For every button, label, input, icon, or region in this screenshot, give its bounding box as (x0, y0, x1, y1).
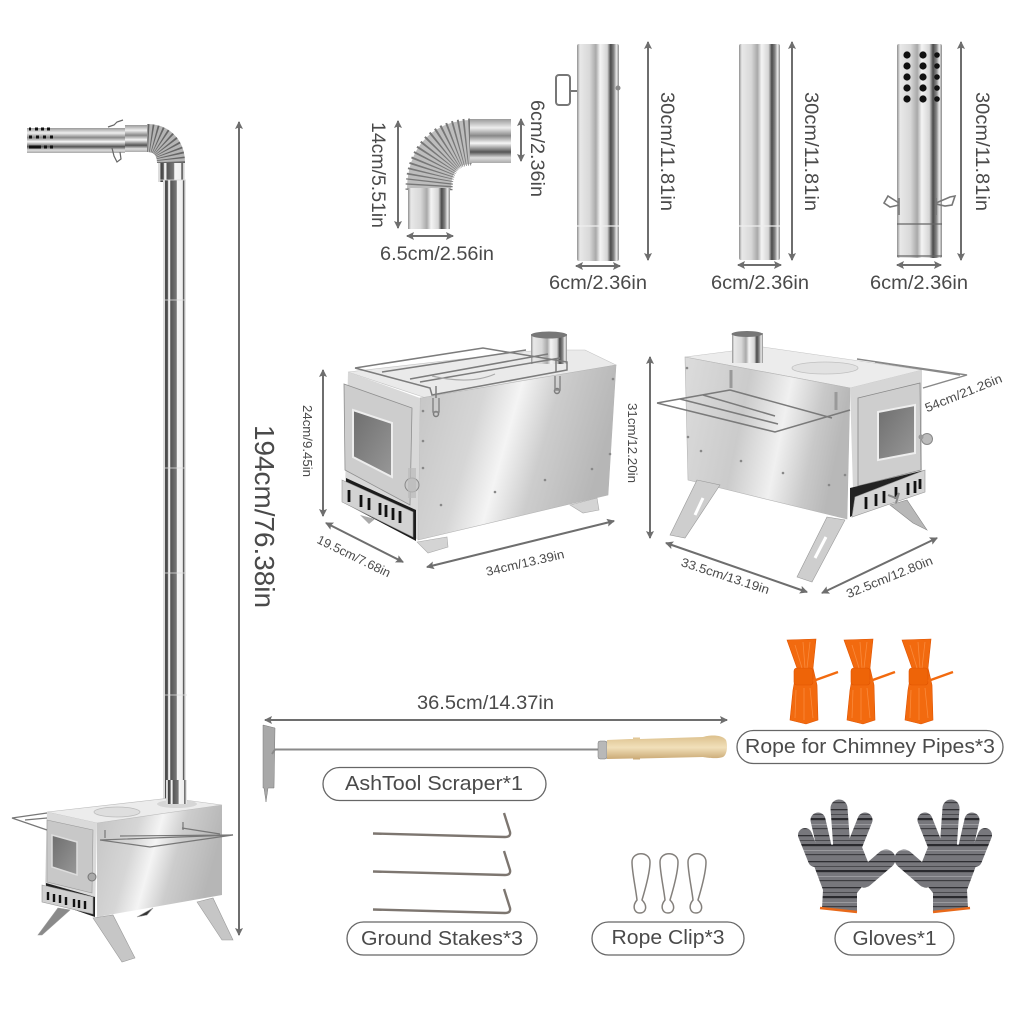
cap pipe body (897, 44, 942, 258)
cap pipe with vent holes (884, 44, 955, 258)
chimney elbow (147, 138, 171, 163)
screws (686, 367, 846, 486)
stove body side (97, 805, 222, 917)
ash drawer (850, 470, 925, 517)
damper pipe width arrow (576, 265, 620, 267)
height label: 194cm/76.38in (249, 425, 280, 608)
packed stove depth arrow (326, 523, 403, 562)
left glove (805, 808, 886, 912)
cap pipe width arrow (897, 264, 941, 266)
wooden handle (607, 735, 727, 760)
stove top plate (94, 807, 140, 817)
gloves label pill (835, 922, 954, 955)
top plate (432, 374, 495, 380)
damper knob (616, 86, 620, 90)
door (858, 383, 921, 486)
stove open view (657, 331, 967, 582)
stakes label pill (347, 922, 537, 955)
scraper label pill: AshTool Scraper*1 (345, 773, 523, 795)
chimney cap horizontal pipe (27, 120, 147, 162)
door knob (918, 434, 932, 444)
clip 1 (632, 854, 650, 913)
rope bundle 3 (902, 639, 953, 724)
packed stove length label: 34cm/13.39in (485, 547, 566, 579)
cap pipe width label: 6cm/2.36in (870, 272, 968, 294)
open stove height label: 31cm/12.20in (625, 403, 639, 483)
clip 3 (688, 854, 706, 913)
packed stove height label: 24cm/9.45in (300, 405, 314, 477)
damper pipe (556, 44, 620, 261)
ash drawer (342, 478, 416, 541)
ash scraper tool (263, 725, 727, 802)
packed stove depth label: 19.5cm/7.68in (315, 533, 393, 580)
open stove depth label: 32.5cm/12.80in (844, 554, 935, 601)
pipe body (577, 44, 619, 261)
rope bundle 2 (844, 639, 895, 724)
pipe collar line (577, 225, 619, 227)
elbow width label: 6.5cm/2.56in (380, 243, 494, 265)
cap pipe collar (897, 224, 942, 256)
elbow height arrow (397, 121, 399, 228)
chimney vertical pipe (158, 162, 187, 806)
blade (263, 725, 275, 802)
straight pipe width arrow (738, 264, 781, 266)
damper pipe height label: 30cm/11.81in (656, 92, 678, 211)
straight pipe width label: 6cm/2.36in (711, 272, 809, 294)
ground stakes (373, 813, 510, 913)
door latch (405, 468, 419, 498)
ash drawer (42, 883, 95, 917)
gloves (805, 808, 985, 912)
gloves label pill: Gloves*1 (852, 928, 936, 950)
elbow height label: 14cm/5.51in (367, 122, 389, 228)
door (344, 384, 412, 505)
scraper width label: 36.5cm/14.37in (417, 692, 554, 714)
clips label pill: Rope Clip*3 (612, 927, 724, 949)
wing clips (884, 196, 955, 215)
elbow outlet arrow (520, 119, 522, 161)
side panel (418, 365, 616, 540)
cap pipe height label: 30cm/11.81in (971, 92, 993, 211)
stove packed view (342, 332, 616, 553)
front panel (850, 370, 922, 490)
cap pipe height arrow (960, 42, 962, 260)
open stove length label: 33.5cm/13.19in (679, 555, 771, 597)
back leg (890, 500, 927, 530)
outlet pipe (732, 331, 763, 363)
straight pipe height arrow (791, 42, 793, 260)
clip 2 (660, 854, 678, 913)
stove top (47, 798, 222, 823)
side rack (657, 370, 850, 432)
stove legs (38, 898, 233, 962)
front panel (345, 372, 420, 540)
elbow outlet (470, 119, 511, 163)
stake 1 (373, 813, 510, 837)
elbow width arrow (407, 235, 453, 237)
ropes (787, 639, 953, 724)
clips label pill (592, 922, 744, 955)
height dimension arrow (238, 122, 240, 935)
folded rack (355, 348, 567, 416)
rope label pill (737, 730, 1003, 764)
rope bundle 1 (787, 639, 838, 724)
stake 2 (373, 851, 510, 875)
elbow pipe (408, 119, 511, 229)
rope clips (632, 854, 706, 913)
elbow outlet label: 6cm/2.36in (526, 100, 548, 197)
damper pipe height arrow (647, 42, 649, 260)
outlet pipe (531, 332, 567, 364)
top face (348, 350, 616, 400)
packed stove height arrow (322, 370, 324, 516)
legs (670, 480, 845, 582)
open stove depth arrow (822, 538, 937, 593)
damper handle (556, 75, 577, 105)
side racks (12, 813, 233, 847)
lower pipe collar (166, 780, 187, 804)
scraper label pill (323, 768, 546, 800)
rack width label: 54cm/21.26in (923, 371, 1004, 415)
packed stove length arrow (427, 521, 614, 567)
stove pipe flange (157, 800, 197, 808)
rope label pill: Rope for Chimney Pipes*3 (745, 736, 995, 758)
ferrule (598, 741, 607, 759)
elbow inlet (408, 188, 450, 229)
open stove length arrow (666, 543, 807, 592)
stove front and door (45, 812, 97, 917)
cooking plate (792, 362, 858, 374)
side panel (685, 357, 850, 519)
assembled stove with chimney (12, 120, 233, 962)
straight pipe (739, 44, 780, 260)
stake 3 (373, 889, 510, 913)
top face (685, 347, 922, 388)
corrugated bend (429, 142, 472, 190)
back rack (857, 359, 967, 388)
stakes label pill: Ground Stakes*3 (361, 928, 523, 950)
rod (272, 750, 598, 754)
screws (422, 378, 614, 506)
open stove height arrow (649, 357, 651, 538)
scraper width arrow (265, 719, 727, 721)
right glove (904, 808, 985, 912)
straight pipe height label: 30cm/11.81in (800, 92, 822, 211)
damper pipe width label: 6cm/2.36in (549, 272, 647, 294)
feet (417, 498, 599, 553)
vent holes (903, 51, 940, 103)
